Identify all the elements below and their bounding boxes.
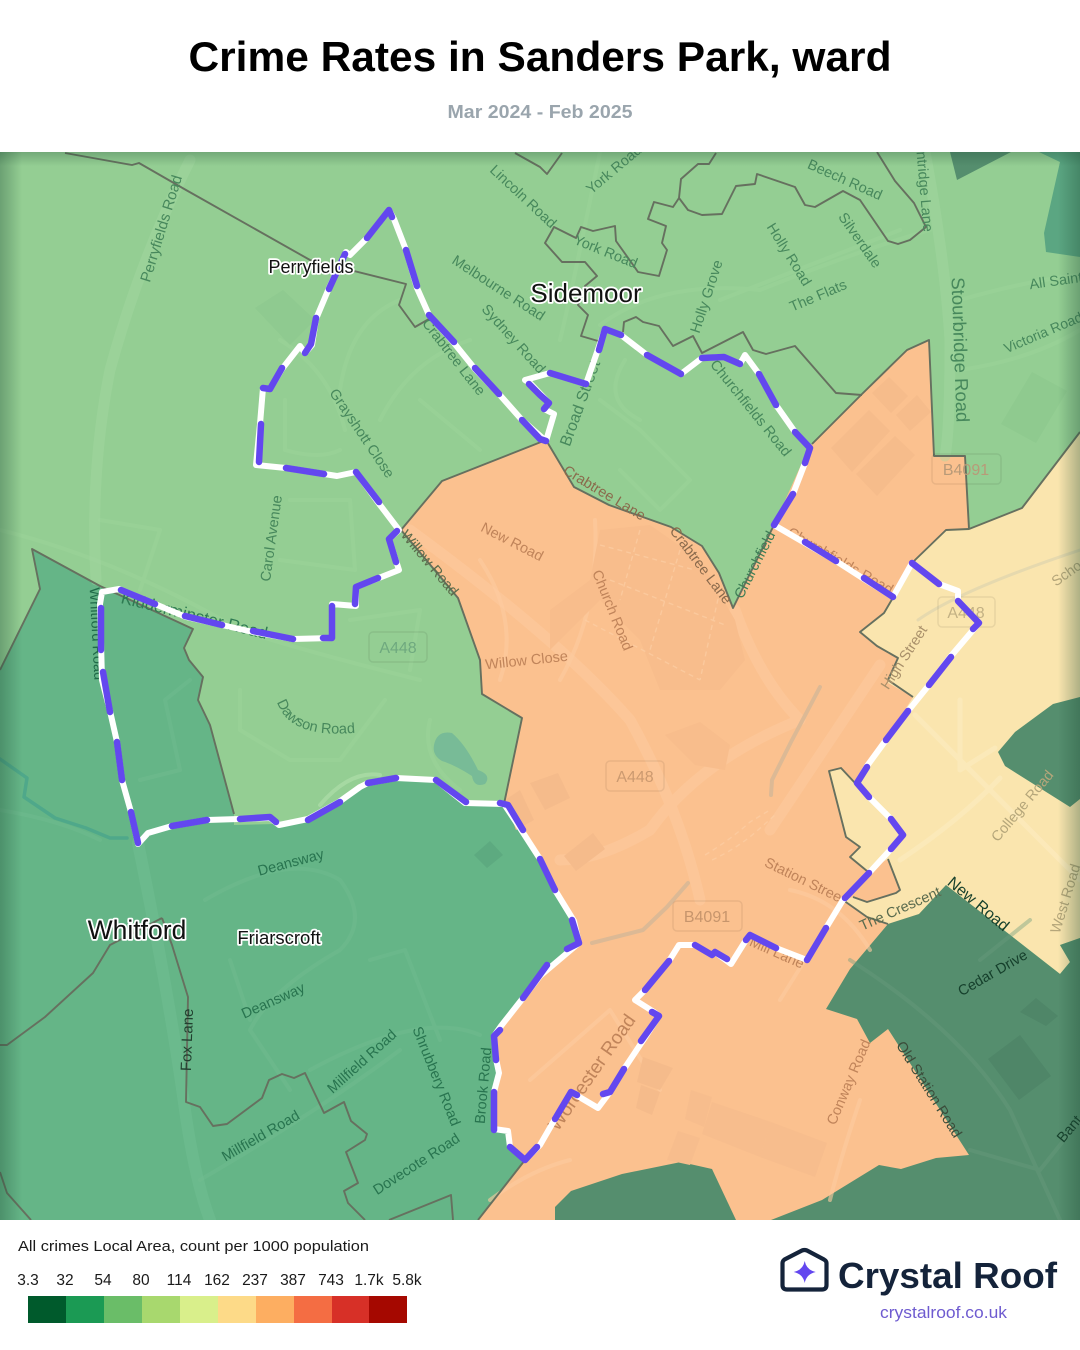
stream [0,759,127,838]
legend tick values: 80 [132,1272,150,1289]
ward and area boundary lines [0,152,1080,1220]
road shields: B4091 [943,462,989,479]
subtitle: date range: Mar 2024 - Feb 2025 [448,102,632,122]
road labels: light green area: Stourbridge Road [947,277,974,423]
lake [434,732,487,785]
legend title: All crimes Local Area, count per 1000 population [18,1238,369,1255]
road labels: orange area: New Road [478,520,546,565]
road labels: Whitford area: Deansway [256,846,326,880]
road labels: light green area: Holly Road [763,221,814,289]
legend tick values [17,1272,422,1289]
road labels: light green area: Perryfields Road [137,173,186,284]
legend tick values: 743 [318,1272,344,1289]
road labels: orange area: High Street [878,623,931,693]
zone: top dark green [950,152,1011,180]
road labels: light green area: Kidderminster Road [119,588,270,643]
road shields: A448 [947,605,985,622]
legend tick values: 1.7k [354,1272,384,1289]
road labels: light green area: Churchfields Road [706,357,794,460]
road labels: orange area: Worcester Road [545,1011,640,1135]
road labels: light green area: Carol Avenue [258,494,286,583]
road labels: light green area: Churchfield [732,529,779,601]
road labels: Whitford area: Deansway [239,980,308,1022]
road labels: yellow area [989,551,1080,935]
legend tick values: 5.8k [392,1272,422,1289]
legend tick values: 54 [94,1272,112,1289]
road labels: light green area: Dawson Road [277,699,354,734]
road labels: dark green area: Cedar Drive [956,947,1030,1000]
logo: Crystal Roof [782,1250,1058,1322]
zone: top right mid green [1039,152,1080,257]
road labels: yellow area: College Road [989,768,1057,845]
place labels: Sidemoor [530,278,642,308]
map edge shading [0,152,1080,1220]
legend tick values: 237 [242,1272,268,1289]
road labels: dark green area: Old Station Road [892,1039,964,1141]
legend tick values: 3.3 [17,1272,39,1289]
legend [17,1238,422,1323]
legend tick values: 32 [56,1272,74,1289]
buildings and parks [434,530,1045,1165]
road labels: light green area: York Road [571,232,640,272]
road labels: orange area [397,463,931,1135]
lake path [320,774,380,805]
ward outline: white base [100,210,979,1160]
road labels: dark green area: New Road [944,874,1012,935]
zone: dark green south [555,1162,736,1220]
road labels: orange area: Willow Road [397,527,461,599]
road labels: orange area: Crabtree Lane [666,524,734,607]
road labels: light green area: Beech Road [805,157,884,204]
road labels: light green area [114,152,1080,768]
road shields: A448 [379,640,417,657]
zone: dark green south east [771,885,1080,1220]
road labels: light green area: York Road [584,142,645,198]
place labels: Friarscroft [237,927,321,948]
place labels: Perryfields [268,257,354,277]
icon: house with star [782,1250,826,1290]
place labels [88,257,642,948]
road labels: orange area: Churchfields Road [784,525,896,598]
Sanders Park ward outline [100,210,979,1160]
zone: dark green east blob [998,697,1080,807]
road labels: orange area: Willow Close [484,649,569,673]
legend tick values: 387 [280,1272,306,1289]
road labels: Whitford area: Brook Road [473,1047,495,1124]
road labels: Whitford area: Dovecote Road [371,1131,463,1199]
road labels: orange area: Station Street [762,855,848,908]
road shields: A448 [616,769,654,786]
road labels: Whitford area: Millfield Road [325,1027,400,1097]
ward outline: purple dashes [101,210,979,1160]
road labels: light green area: Broad Street [557,358,604,449]
road labels: dark green area [857,874,1080,1146]
road labels: Whitford area [86,587,495,1199]
road labels: orange area: Church Road [588,568,635,653]
canal [592,687,820,943]
place labels: Whitford [88,915,186,945]
road labels: light green area: Holly Grove [688,258,727,335]
zone: town centre orange [401,340,1000,1220]
logo url: crystalroof.co.uk [880,1304,1008,1322]
road labels: light green area: Lincoln Road [486,162,559,232]
roads network [0,152,1080,1220]
legend colour scale [28,1296,407,1323]
road labels: light green area: Melbourne Road [449,253,547,325]
road labels: Whitford area: Shrubbery Road [409,1025,463,1128]
title: Crime Rates in Sanders Park, ward [188,33,892,80]
road labels: light green area: Crabtree Lane [418,316,488,399]
map panel [0,152,1080,1220]
zone: Whitford mid green [0,549,620,1220]
zone: yellow east [829,432,1080,974]
legend tick values: 162 [204,1272,230,1289]
road labels: light green area: Sydney Road [478,302,548,377]
road shields [369,454,1001,931]
road labels: orange area: Crabtree Lane [560,463,648,524]
road labels: Whitford area: Fox Lane [178,1008,197,1071]
legend tick values: 114 [167,1272,192,1289]
road shields: B4091 [684,909,730,926]
road labels: orange area: Conway Road [824,1037,874,1127]
road labels: light green area: ntridge Lane [913,151,935,233]
road labels: light green area: Grayshott Close [326,386,397,481]
zone: light green base [0,152,1080,974]
road labels: light green area: The Flats [787,277,849,315]
road labels: orange area: Mill Lane [747,934,806,972]
road labels: dark green area: The Crescent [857,884,943,934]
road labels: light green area: Silverdale [834,210,884,271]
logo wordmark: Crystal Roof [838,1255,1058,1296]
road labels: Whitford area: Millfield Road [219,1108,303,1165]
road labels: Whitford area: Whitford Road [86,587,106,680]
